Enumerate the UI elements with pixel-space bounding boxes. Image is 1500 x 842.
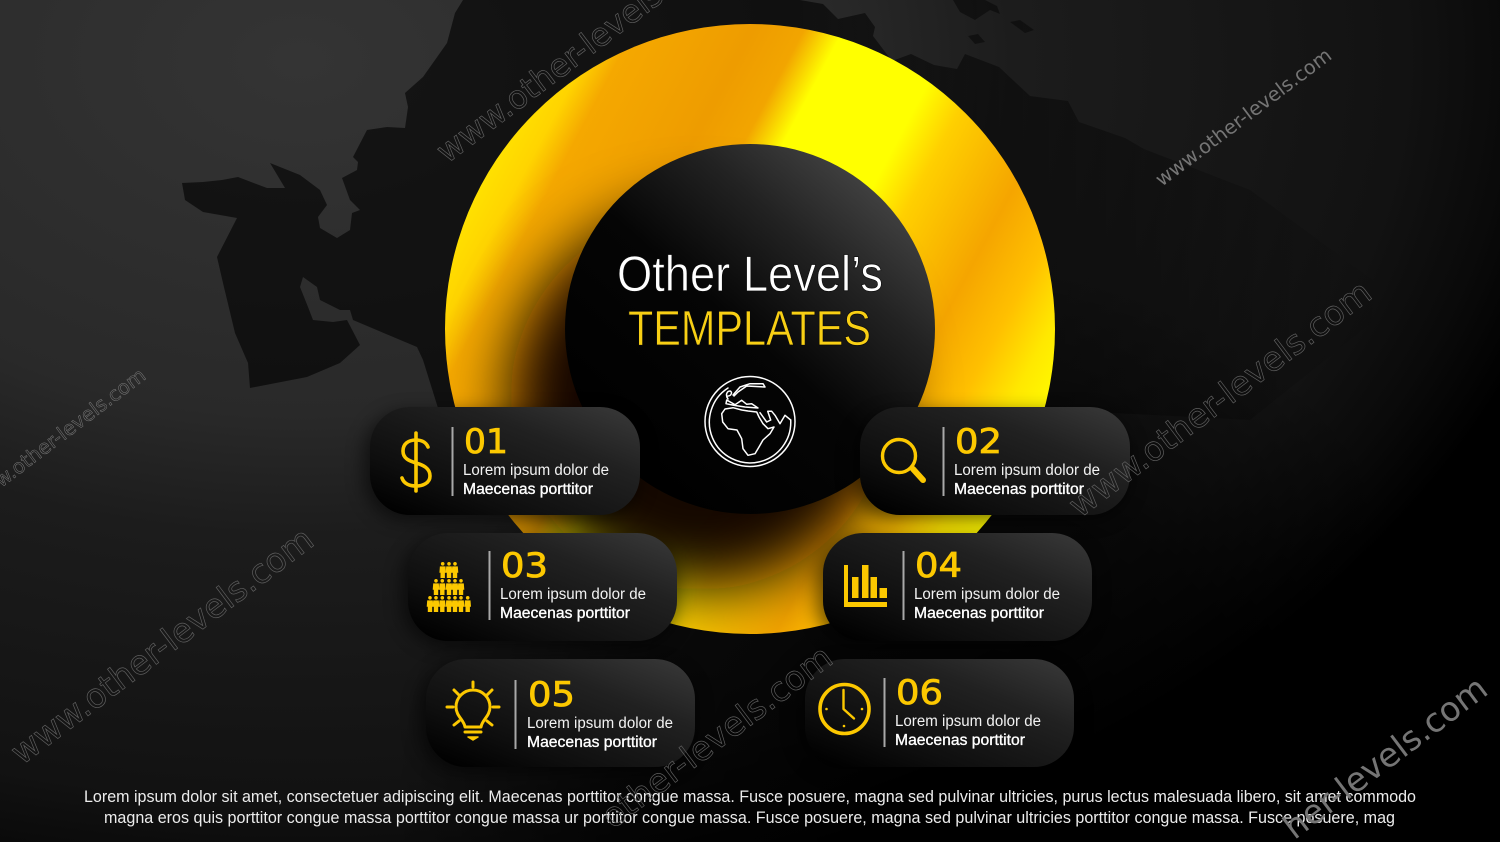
text 05 [527,715,673,751]
text 01: Maecenas porttitor [463,481,593,498]
text 04: Maecenas porttitor [914,605,1044,622]
icon: magnifier [882,440,923,480]
number 03: 03 [501,546,548,586]
icon: bar chart [844,565,887,607]
footer paragraph [84,787,1416,827]
number 01: 01 [464,422,508,462]
title: TEMPLATES: TEMPLATES [628,302,871,356]
text 06 [895,713,1041,749]
text 04: Lorem ipsum dolor de [914,586,1060,603]
number 04: 04 [915,546,962,586]
footer paragraph: magna eros quis porttitor congue massa porttitor congue massa ur porttitor congue massa. Fusce posuere, magna sed pulvinar ultricies porttitor congue massa. Fusce posuere, mag [104,808,1395,827]
number 05: 05 [528,675,575,715]
title: Other Level's: Other Level’s [617,246,883,302]
number 02: 02 [955,422,1002,462]
text 03: Maecenas porttitor [500,605,630,622]
world map: left landmass [182,0,800,410]
panel 05 [420,659,695,772]
text 04 [914,586,1060,622]
text 02: Lorem ipsum dolor de [954,462,1100,479]
icon: dollar [402,433,430,491]
panel 04 [817,533,1092,646]
panel 02 [854,407,1130,520]
text 06: Lorem ipsum dolor de [895,713,1041,730]
central dark circle [565,144,935,514]
icon: light bulb [447,682,499,740]
text 06: Maecenas porttitor [895,732,1025,749]
icon: people pyramid [427,562,471,612]
watermark: lower left: www.other-levels.com [3,519,321,772]
icon: globe [705,376,795,466]
watermark: upper right: www.other-levels.com [1151,44,1336,191]
panel 01 [364,407,640,520]
footer paragraph: Lorem ipsum dolor sit amet, consectetuer adipiscing elit. Maecenas porttitor congue massa. Fusce posuere, magna sed pulvinar ultricies, purus lectus malesuada libero, sit amet commodo [84,787,1416,806]
text 03 [500,586,646,622]
icon: clock [820,684,869,734]
text 01 [463,462,609,498]
text 02: Maecenas porttitor [954,481,1084,498]
panel 06 [799,659,1074,772]
watermark: bottom right: her-levels.com [1276,668,1495,842]
gold ring [445,24,1055,634]
panel 03 [402,533,677,646]
text 02 [954,462,1100,498]
watermark: bottom centre: other-levels.com [594,637,840,836]
text 05: Lorem ipsum dolor de [527,715,673,732]
text 05: Maecenas porttitor [527,734,657,751]
text 03: Lorem ipsum dolor de [500,586,646,603]
world map: right landmass [800,0,1400,420]
number 06: 06 [896,673,943,713]
text 01: Lorem ipsum dolor de [463,462,609,479]
watermark: right middle: www.other-levels.com [1061,272,1379,525]
